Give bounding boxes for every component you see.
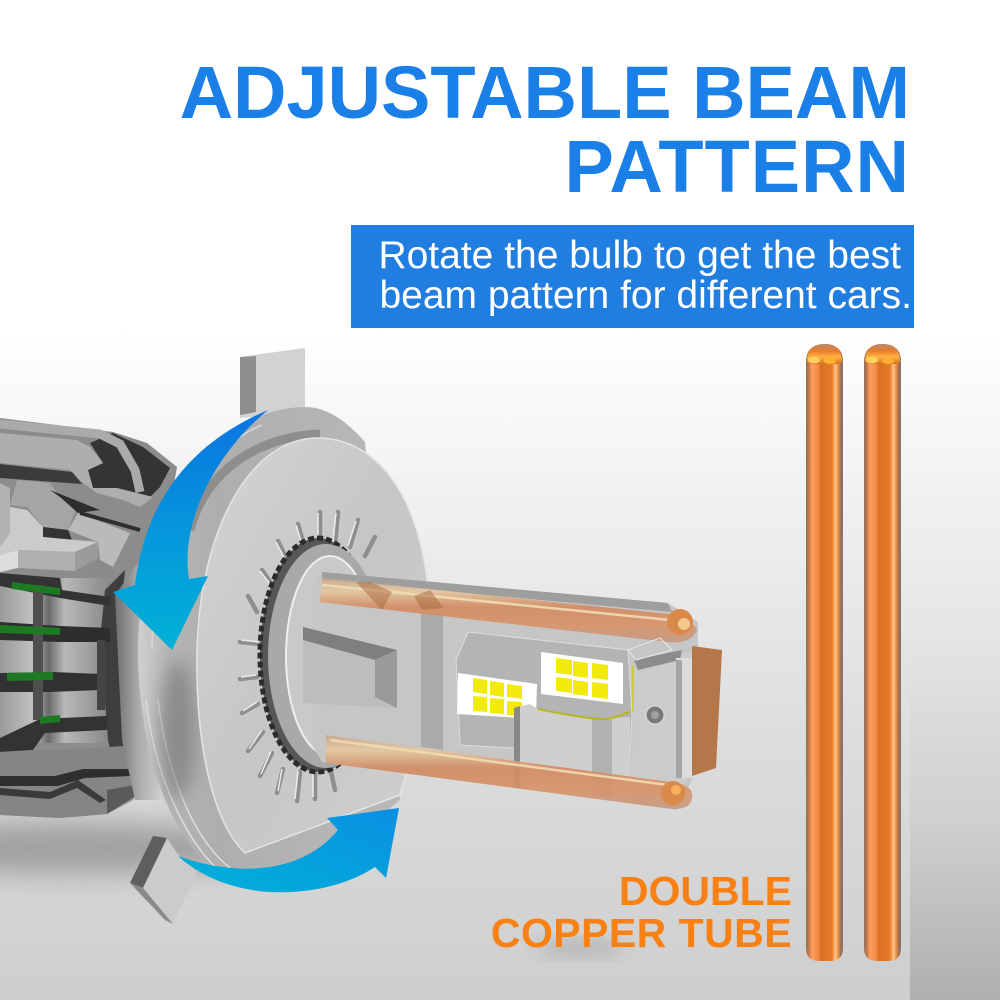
LED board right [541,652,623,704]
left block [0,483,10,547]
lower translucent copper pipe [326,735,692,809]
subtitle panel [351,225,914,328]
top locating tab [240,348,305,418]
copper tube label [491,868,792,956]
copper back face [692,646,722,776]
title: ADJUSTABLE BEAM [180,51,910,134]
rear flange [138,407,400,892]
central light piece [0,507,98,555]
arrow: rotate sweeping right [178,808,399,892]
copper tube right [864,344,901,961]
front disc [197,438,429,853]
LED board left [457,673,537,719]
wedge [303,627,397,708]
neck between heatsink and flange [115,560,160,800]
copper pipe end glints [667,609,693,635]
dark fins [0,573,110,606]
copper tube left [806,344,843,961]
subtitle panel: beam pattern for different cars. [379,274,912,317]
bottom fins [0,746,135,818]
mid plates [10,480,77,530]
PCB recess [456,632,632,755]
lower fin bodies [0,578,108,743]
subtitle panel: Rotate the bulb to get the best [378,234,901,277]
upper translucent copper pipe [320,578,697,642]
retaining pins [240,512,375,801]
clip [514,704,631,803]
text: PATTERN [565,125,910,208]
toothed crown ring [260,538,376,772]
copper tube label: COPPER TUBE [491,910,792,956]
top light plate [0,433,153,507]
bulb body [303,572,722,810]
heatsink fan [0,418,177,818]
green circuit board glimpses [12,582,60,595]
end cap [632,650,698,790]
top fin dark [88,433,170,500]
bulb base flange [115,348,429,924]
fold shapes on pipes [356,582,444,610]
bottom locating tab [130,836,197,924]
arrow: rotate counter-clockwise downward [113,410,268,650]
rim behind fins [100,570,132,790]
copper tube label: DOUBLE [619,868,792,914]
